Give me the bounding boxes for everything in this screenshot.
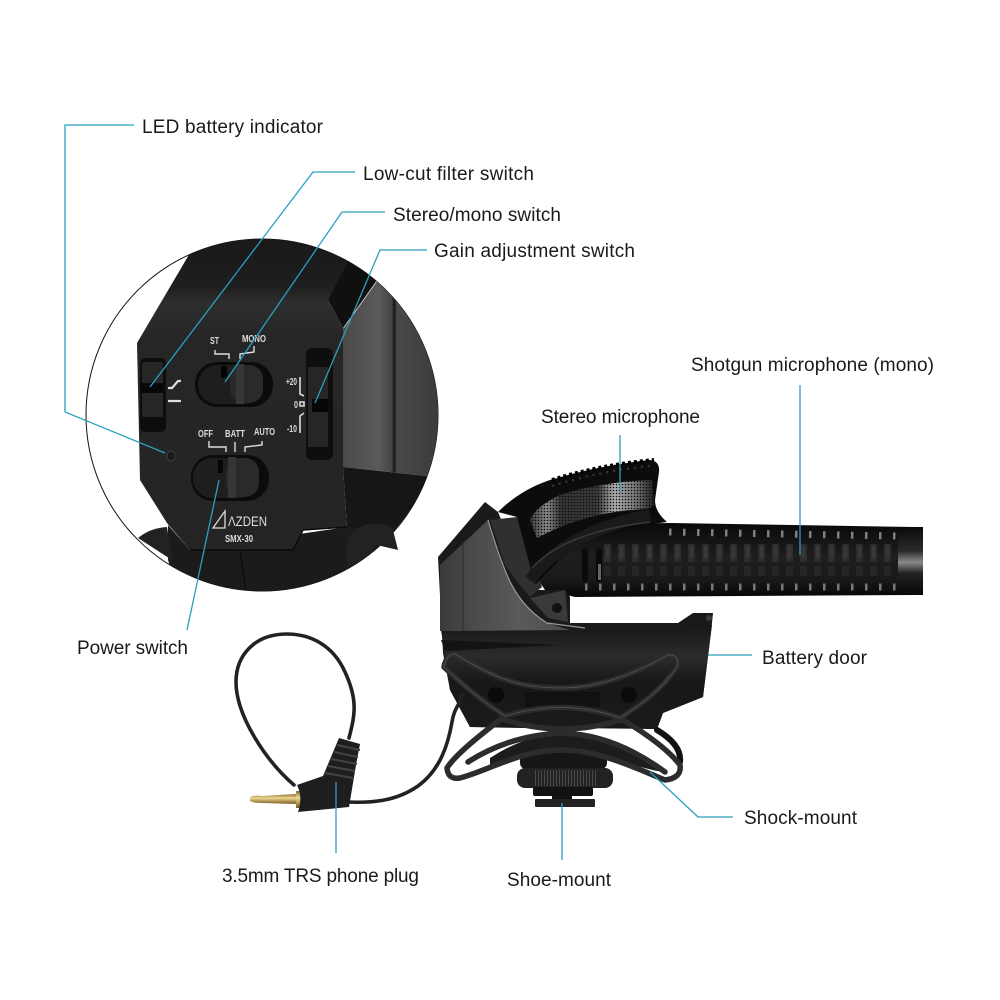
- label: 3.5mm TRS phone plug: 3.5mm TRS phone plug: [222, 866, 419, 887]
- label: Power switch: Power switch: [77, 638, 188, 659]
- power switch: OFF: [198, 429, 213, 440]
- gain switch: 0: [294, 400, 298, 411]
- gain switch: [286, 348, 333, 460]
- detail circle: control panel close-up: [86, 235, 445, 620]
- label: LED battery indicator: LED battery indicator: [142, 117, 324, 138]
- brand: ΛZDEN: [228, 513, 267, 529]
- power switch: BATT: [225, 429, 245, 440]
- audio cable: [236, 634, 462, 802]
- housing grey side: [440, 520, 570, 631]
- shoe mount: [517, 738, 613, 807]
- brand: [213, 511, 267, 545]
- shock mount: [444, 654, 680, 780]
- stereo/mono switch: [195, 334, 273, 407]
- label: Shotgun microphone (mono): Shotgun microphone (mono): [691, 355, 934, 376]
- right side panel: [343, 280, 445, 478]
- 3.5mm TRS plug: [250, 738, 360, 812]
- microphone unit: [236, 460, 923, 812]
- front control panel: [137, 235, 347, 550]
- label: Battery door: Battery door: [762, 648, 868, 669]
- shotgun microphone tube: [535, 523, 923, 597]
- panel knob: [347, 523, 398, 568]
- label: Stereo microphone: Stereo microphone: [541, 407, 700, 428]
- power switch: [191, 427, 275, 501]
- brand: SMX-30: [225, 534, 253, 545]
- screw plate: [530, 590, 568, 622]
- lower mount behind panel: [168, 506, 412, 591]
- label: Low-cut filter switch: Low-cut filter switch: [363, 164, 534, 185]
- main housing: [438, 502, 713, 729]
- label: Stereo/mono switch: Stereo/mono switch: [393, 205, 561, 226]
- power switch: AUTO: [254, 427, 275, 438]
- label: Gain adjustment switch: Gain adjustment switch: [434, 241, 635, 262]
- LED indicator: [167, 451, 175, 461]
- upper body shoulder: [328, 261, 376, 328]
- stereo microphone head: [498, 460, 667, 585]
- gain switch: +20: [286, 377, 297, 388]
- gain switch: -10: [287, 424, 297, 435]
- label: Shoe-mount: Shoe-mount: [507, 870, 612, 891]
- stereo/mono switch: MONO: [242, 334, 266, 345]
- label: Shock-mount: Shock-mount: [744, 808, 858, 829]
- low-cut switch: [140, 358, 181, 432]
- stereo/mono switch: ST: [210, 336, 219, 347]
- leader lines: [65, 125, 800, 860]
